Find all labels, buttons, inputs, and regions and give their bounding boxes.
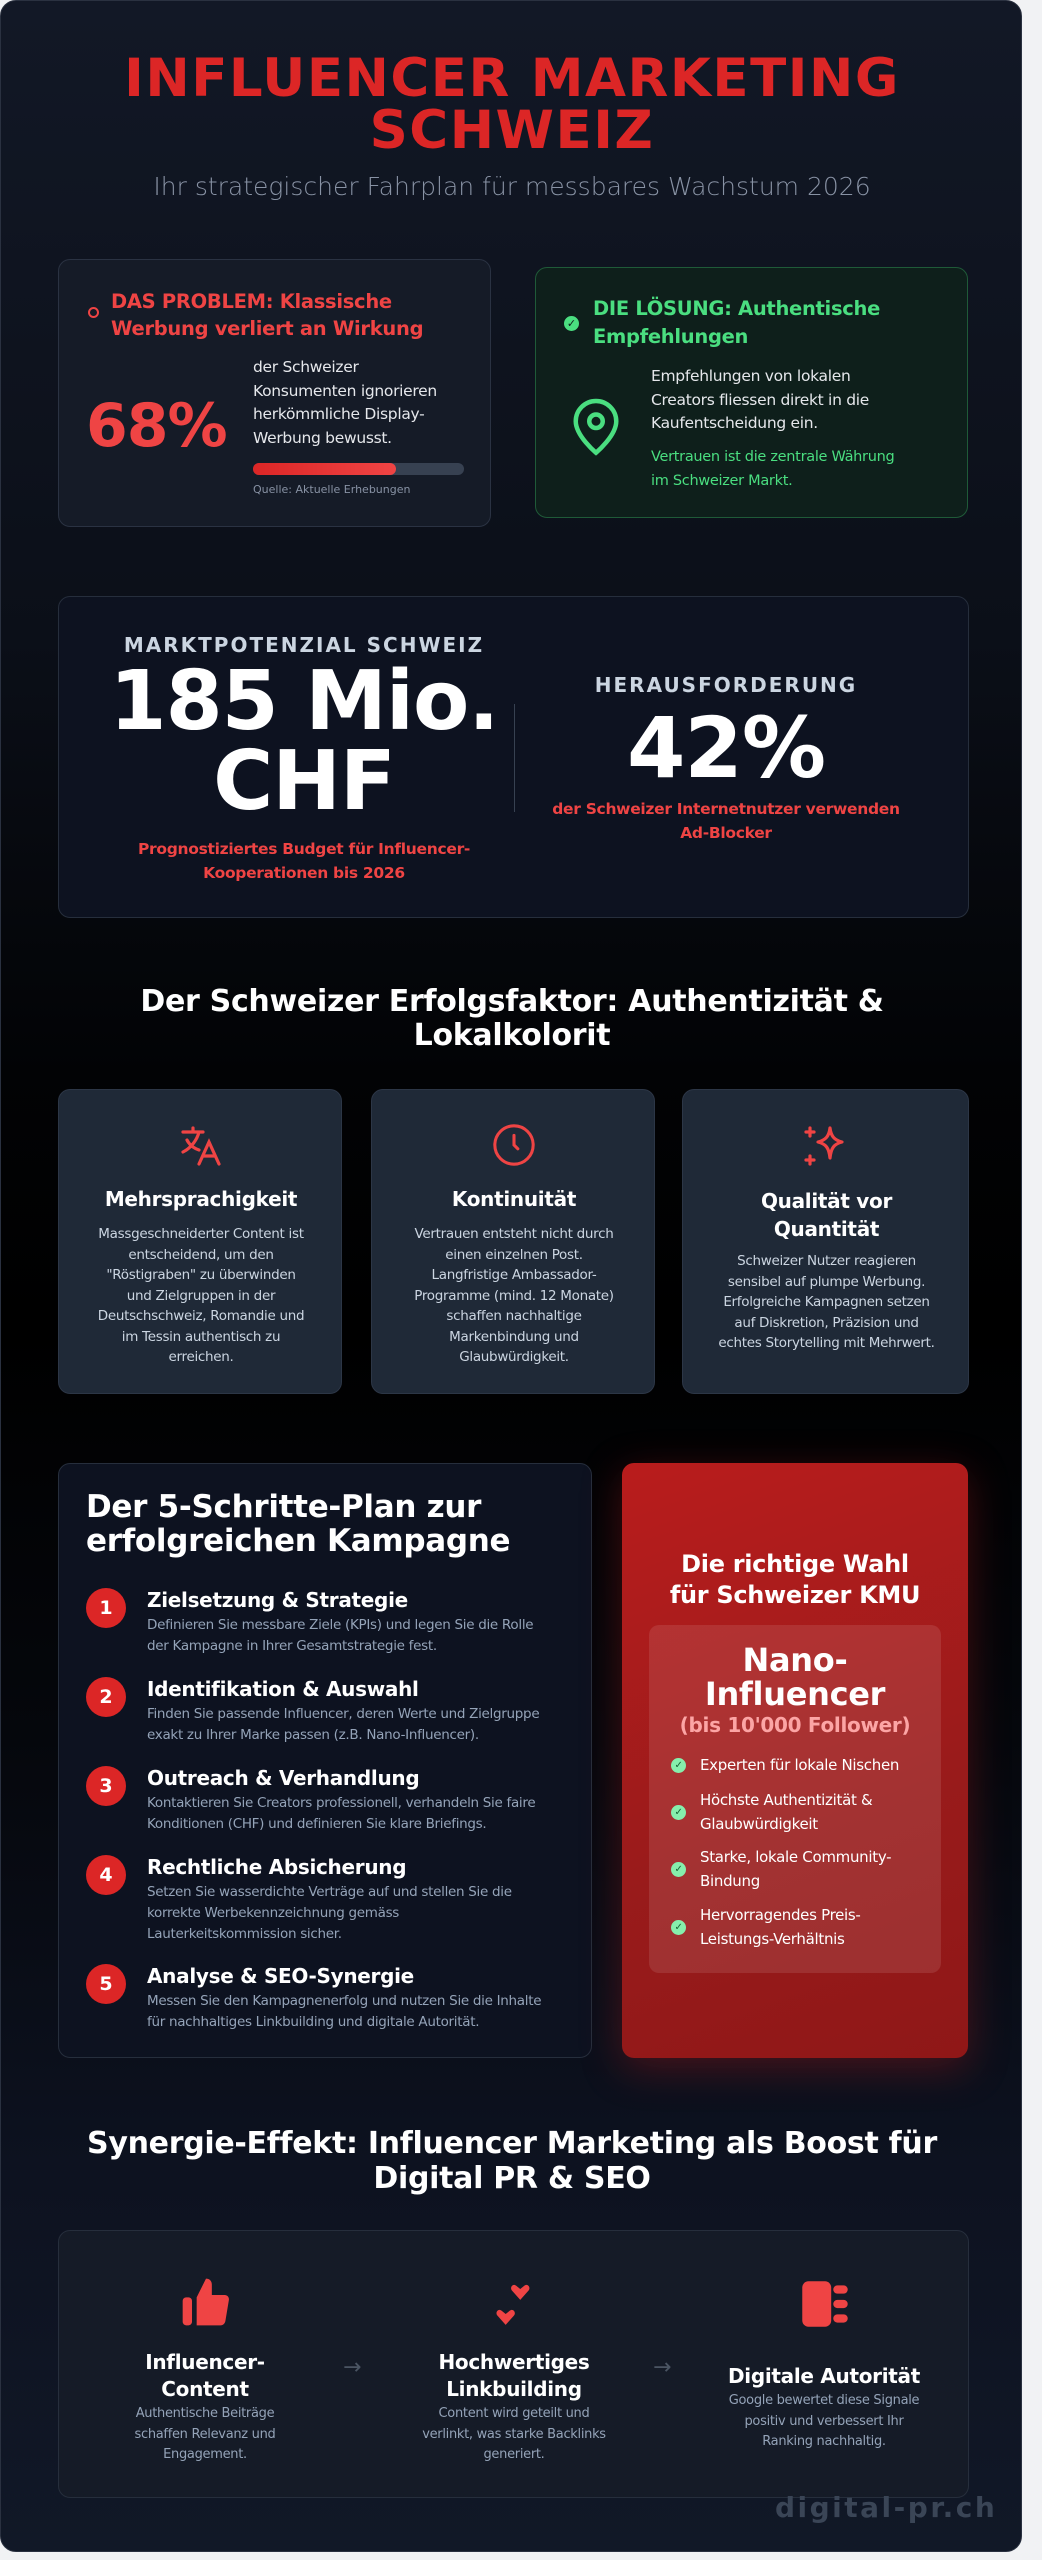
step 5: 5 bbox=[99, 1973, 113, 1995]
step 3 bbox=[86, 1766, 535, 1832]
text: echtes Storytelling mit Mehrwert. bbox=[718, 1335, 935, 1351]
text: Massgeschneiderter Content ist bbox=[98, 1226, 304, 1242]
icon: clock bbox=[493, 1124, 535, 1166]
solution heading: DIE LÖSUNG: Authentische bbox=[593, 297, 880, 320]
text: Glaubwürdigkeit. bbox=[459, 1349, 569, 1365]
step 5 bbox=[86, 1964, 541, 2030]
text: Deutschschweiz, Romandie und bbox=[98, 1308, 304, 1324]
heading: für Schweizer KMU bbox=[670, 1581, 920, 1609]
icon: map pin bbox=[574, 398, 618, 456]
panel: Mehrsprachigkeit bbox=[58, 1089, 342, 1394]
solution highlight: Vertrauen ist die zentrale Währung bbox=[651, 449, 894, 465]
source: Quelle: Aktuelle Erhebungen bbox=[253, 483, 410, 496]
icon: server bbox=[802, 2281, 848, 2327]
column: Digitale Autorität: Ranking nachhaltig. bbox=[762, 2434, 886, 2449]
inner box bbox=[649, 1625, 941, 1973]
step 1 bbox=[86, 1588, 533, 1654]
benefits list: ✓ bbox=[674, 1922, 683, 1933]
text: auf Diskretion, Präzision und bbox=[734, 1314, 919, 1330]
title: SCHWEIZ bbox=[370, 100, 654, 161]
benefits list: ✓ bbox=[674, 1864, 683, 1875]
text: sensibel auf plumpe Werbung. bbox=[728, 1274, 925, 1290]
heading bbox=[86, 1489, 510, 1559]
step 4: korrekte Werbekennzeichnung gemäss bbox=[147, 1905, 399, 1921]
title: Quantität bbox=[774, 1217, 879, 1241]
column: Linkbuilding: generiert. bbox=[483, 2447, 545, 2462]
solution text bbox=[651, 367, 869, 432]
heading: Synergie: Digital PR & SEO bbox=[373, 2161, 651, 2196]
column: Linkbuilding: Hochwertiges bbox=[438, 2350, 590, 2374]
step 4: Lauterkeitskommission sicher. bbox=[147, 1926, 342, 1942]
column: Digitale Autorität bbox=[728, 2281, 920, 2449]
problem text: herkömmliche Display- bbox=[253, 405, 424, 423]
icon: hearts bbox=[496, 2284, 530, 2325]
title bbox=[761, 1189, 892, 1241]
column: Linkbuilding: Content wird geteilt und bbox=[439, 2406, 589, 2421]
column: Linkbuilding bbox=[422, 2284, 606, 2462]
step 2: 2 bbox=[99, 1686, 113, 1708]
Nano title: Nano- bbox=[743, 1641, 847, 1679]
step 4: Rechtliche Absicherung bbox=[147, 1855, 406, 1879]
icon: check: ✓ bbox=[567, 317, 576, 330]
column: Influencer-Content: Engagement. bbox=[163, 2447, 247, 2462]
step 5: Analyse & SEO-Synergie bbox=[147, 1964, 414, 1988]
icon: sparkles bbox=[804, 1126, 844, 1166]
challenge caption bbox=[552, 800, 900, 842]
market potential label: MARKTPOTENZIAL SCHWEIZ bbox=[124, 633, 484, 657]
title bbox=[124, 48, 900, 161]
Nano title: Influencer bbox=[705, 1675, 885, 1713]
column: Linkbuilding: Linkbuilding bbox=[446, 2377, 582, 2401]
solution text: Empfehlungen von lokalen bbox=[651, 367, 850, 385]
challenge label: HERAUSFORDERUNG bbox=[595, 673, 857, 697]
step 2: Finden Sie passende Influencer, deren Werte und Zielgruppe bbox=[147, 1706, 539, 1722]
panel: problem bbox=[58, 259, 491, 527]
benefits list: Höchste Authentizität & bbox=[700, 1791, 872, 1809]
problem heading: Werbung verliert an Wirkung bbox=[111, 317, 423, 340]
step 4: 4 bbox=[99, 1864, 113, 1886]
Nano title bbox=[705, 1641, 886, 1713]
step 2: exakt zu Ihrer Marke passen (z.B. Nano-Influencer). bbox=[147, 1727, 479, 1743]
step 1: der Kampagne in Ihrer Gesamtstrategie fest. bbox=[147, 1638, 437, 1654]
text: entscheidend, um den bbox=[128, 1246, 274, 1262]
title: INFLUENCER MARKETING bbox=[124, 48, 900, 109]
stat: 68%: 68% bbox=[86, 391, 227, 461]
panel: synergy flow bbox=[58, 2230, 969, 2498]
step 4 bbox=[86, 1855, 512, 1942]
title: Mehrsprachigkeit bbox=[105, 1187, 297, 1211]
text: Schweizer Nutzer reagieren bbox=[737, 1253, 916, 1269]
text: Vertrauen entsteht nicht durch bbox=[414, 1226, 614, 1242]
column: Digitale Autorität: Digitale Autorität bbox=[728, 2364, 920, 2388]
problem heading bbox=[111, 290, 423, 340]
arrow: → bbox=[343, 2355, 361, 2380]
market caption: Kooperationen bis 2026 bbox=[203, 864, 405, 882]
arrow: → bbox=[653, 2355, 671, 2380]
column: Linkbuilding: verlinkt, was starke Backlinks bbox=[422, 2426, 606, 2442]
title: Qualität vor bbox=[761, 1189, 892, 1213]
benefits list: ✓ bbox=[674, 1760, 683, 1771]
column: Influencer-Content: Content bbox=[161, 2377, 249, 2401]
step 1: 1 bbox=[99, 1597, 113, 1619]
market caption: Prognostiziertes Budget für Influencer- bbox=[138, 840, 470, 858]
step 5: Messen Sie den Kampagnenerfolg und nutzen Sie die Inhalte bbox=[147, 1993, 541, 2009]
market caption bbox=[138, 840, 470, 882]
heading: Synergie: Synergie-Effekt: Influencer Marketing als Boost für bbox=[87, 2126, 937, 2161]
challenge caption: der Schweizer Internetnutzer verwenden bbox=[552, 800, 900, 818]
step 1: Zielsetzung & Strategie bbox=[147, 1588, 408, 1612]
divider bbox=[514, 704, 515, 812]
heading: Erfolgsfaktor: Lokalkolorit bbox=[414, 1018, 610, 1053]
text: Programme (mind. 12 Monate) bbox=[414, 1288, 614, 1304]
benefits list: Glaubwürdigkeit bbox=[700, 1815, 818, 1833]
panel: market stats bbox=[58, 596, 969, 918]
step 5: für nachhaltiges Linkbuilding und digitale Autorität. bbox=[147, 2014, 479, 2030]
text: einen einzelnen Post. bbox=[445, 1246, 583, 1262]
text: im Tessin authentisch zu bbox=[122, 1328, 280, 1344]
column: Digitale Autorität: positiv und verbessert Ihr bbox=[744, 2414, 904, 2428]
solution highlight: im Schweizer Markt. bbox=[651, 473, 792, 489]
benefits list: Starke, lokale Community- bbox=[700, 1848, 891, 1866]
heading: Erfolgsfaktor: Der Schweizer Erfolgsfaktor: Authentizität & bbox=[140, 984, 884, 1019]
panel: solution bbox=[535, 267, 968, 518]
problem text bbox=[253, 358, 437, 446]
solution heading: Empfehlungen bbox=[593, 325, 748, 348]
step 3: 3 bbox=[99, 1775, 113, 1797]
step 4: Setzen Sie wasserdichte Verträge auf und stellen Sie die bbox=[147, 1884, 512, 1900]
benefits list bbox=[671, 1756, 899, 1948]
column: Influencer-Content: Authentische Beiträge bbox=[136, 2406, 274, 2421]
stat: 42%: 42% bbox=[627, 699, 825, 797]
heading: Die richtige Wahl bbox=[681, 1550, 909, 1578]
text bbox=[718, 1253, 935, 1351]
icon: thumbs up bbox=[182, 2278, 229, 2326]
benefits list: Bindung bbox=[700, 1872, 760, 1890]
column: Digitale Autorität: Google bewertet diese Signale bbox=[729, 2393, 919, 2408]
step 1: Definieren Sie messbare Ziele (KPIs) und legen Sie die Rolle bbox=[147, 1617, 533, 1633]
heading: Erfolgsfaktor bbox=[140, 984, 884, 1053]
benefits list: Leistungs-Verhältnis bbox=[700, 1930, 845, 1948]
step 3: Outreach & Verhandlung bbox=[147, 1766, 419, 1790]
column: Influencer-Content: Influencer- bbox=[145, 2350, 265, 2374]
follower range: (bis 10'000 Follower) bbox=[680, 1713, 910, 1737]
text: "Röstigraben" zu überwinden bbox=[106, 1267, 296, 1283]
icon: language bbox=[181, 1126, 221, 1166]
subtitle: Ihr strategischer Fahrplan für messbares Wachstum 2026 bbox=[153, 172, 871, 201]
problem text: Werbung bewusst. bbox=[253, 428, 392, 446]
solution text: Creators fliessen direkt in die bbox=[651, 390, 869, 408]
text: und Zielgruppen in der bbox=[127, 1288, 275, 1304]
step 3: Konditionen (CHF) und definieren Sie klare Briefings. bbox=[147, 1816, 486, 1832]
problem text: der Schweizer bbox=[253, 358, 359, 376]
column: Influencer-Content bbox=[134, 2278, 276, 2462]
panel: Qualität bbox=[682, 1089, 969, 1394]
heading: erfolgreichen Kampagne bbox=[86, 1523, 510, 1559]
text: erreichen. bbox=[168, 1349, 234, 1365]
stat: 185 Mio CHF: CHF bbox=[213, 734, 395, 829]
problem text: Konsumenten ignorieren bbox=[253, 382, 437, 400]
step 2: Identifikation & Auswahl bbox=[147, 1677, 419, 1701]
benefits list: Hervorragendes Preis- bbox=[700, 1906, 861, 1924]
text bbox=[414, 1226, 614, 1365]
footer brand: digital-pr.ch bbox=[775, 2491, 997, 2524]
solution highlight bbox=[651, 449, 894, 489]
text: Langfristige Ambassador- bbox=[432, 1267, 596, 1283]
benefits list: ✓ bbox=[674, 1807, 683, 1818]
text bbox=[98, 1226, 304, 1365]
solution text: Kaufentscheidung ein. bbox=[651, 414, 818, 432]
stat: 185 Mio CHF bbox=[110, 654, 498, 829]
heading: Synergie bbox=[87, 2126, 938, 2196]
problem heading: DAS PROBLEM: Klassische bbox=[111, 290, 392, 313]
text: Erfolgreiche Kampagnen setzen bbox=[723, 1294, 930, 1310]
panel: Kontinuität bbox=[371, 1089, 655, 1394]
panel: 5-step plan bbox=[58, 1463, 592, 2058]
column: Influencer-Content: schaffen Relevanz und bbox=[134, 2426, 276, 2442]
heading bbox=[670, 1550, 920, 1609]
title: Kontinuität bbox=[452, 1187, 576, 1211]
solution heading bbox=[593, 296, 880, 348]
progress bar bbox=[253, 463, 464, 475]
text: schaffen nachhaltige bbox=[446, 1308, 582, 1324]
challenge caption: Ad-Blocker bbox=[680, 824, 772, 842]
benefits list: Experten für lokale Nischen bbox=[700, 1756, 899, 1774]
step 2 bbox=[86, 1677, 539, 1743]
icon: check bbox=[564, 316, 579, 331]
panel: Nano-Influencer recommendation bbox=[622, 1463, 968, 2058]
icon: problem dot bbox=[88, 307, 99, 318]
text: Markenbindung und bbox=[449, 1328, 579, 1344]
stat: 185 Mio CHF: 185 Mio. bbox=[110, 654, 498, 749]
heading: Der 5-Schritte-Plan zur bbox=[86, 1489, 481, 1525]
step 3: Kontaktieren Sie Creators professionell, verhandeln Sie faire bbox=[147, 1795, 535, 1811]
